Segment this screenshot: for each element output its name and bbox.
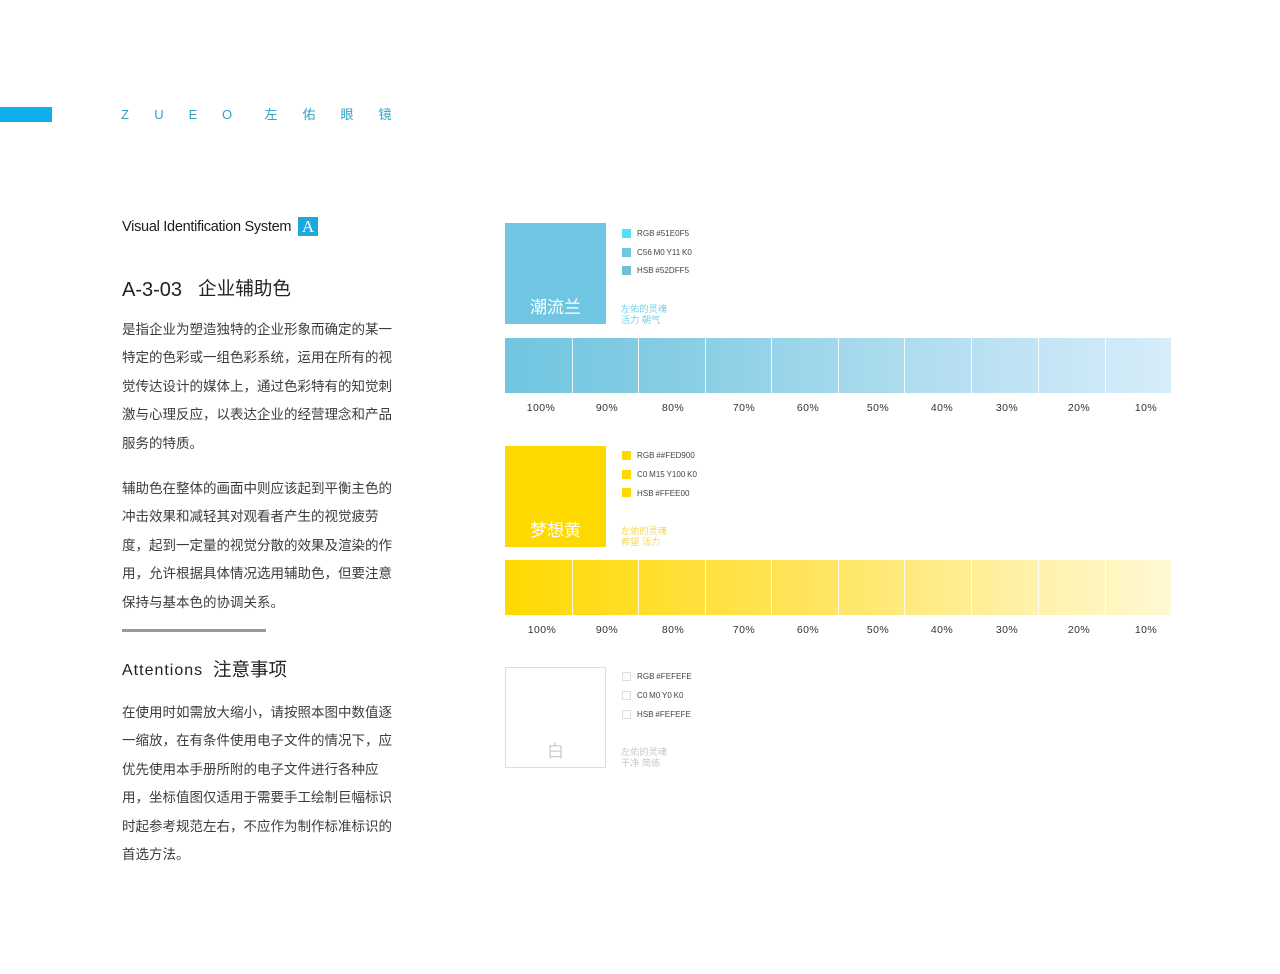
intro paragraph: 激与心理反应，以表达企业的经营理念和产品 xyxy=(122,407,392,422)
brand header xyxy=(121,107,392,122)
brand header: U xyxy=(154,107,164,122)
second paragraph: 保持与基本色的协调关系。 xyxy=(122,594,284,610)
yellow colour name: 梦想黄 xyxy=(530,520,581,540)
blue tint labels: 80% xyxy=(662,402,684,414)
icon: A badge xyxy=(298,217,318,236)
panel: yellow swatch xyxy=(505,446,606,547)
blue tint labels: 90% xyxy=(596,402,618,414)
icon: blue CMYK chip xyxy=(622,248,631,257)
yellow tint labels: 10% xyxy=(1135,624,1157,636)
yellow tint labels: 70% xyxy=(733,624,755,636)
blue description: 左佑的灵魂 xyxy=(621,304,667,314)
yellow tint labels: 60% xyxy=(797,624,819,636)
attentions paragraph: 一缩放，在有条件使用电子文件的情况下，应 xyxy=(122,733,392,748)
second paragraph: 度，起到一定量的视觉分散的效果及渲染的作 xyxy=(122,538,392,552)
icon: A badge: A xyxy=(302,217,314,236)
brand header: 眼 xyxy=(340,107,354,122)
brand header: O xyxy=(222,107,232,122)
blue RGB value: RGB #51E0F5 xyxy=(637,229,689,238)
attentions paragraph: 用，坐标值图仅适用于需要手工绘制巨幅标识 xyxy=(122,790,392,805)
yellow tint labels: 100% xyxy=(528,624,556,636)
white colour name: 白 xyxy=(547,742,564,761)
brand header: 左 xyxy=(264,107,278,122)
blue tint labels: 40% xyxy=(931,402,953,414)
system heading: Visual Identification System xyxy=(122,219,291,235)
section title: 企业辅助色 xyxy=(198,278,291,299)
intro paragraph xyxy=(122,322,392,450)
yellow tint labels: 50% xyxy=(867,624,889,636)
blue colour name: 潮流兰 xyxy=(530,298,581,317)
attentions heading: Attentions xyxy=(122,662,203,679)
intro paragraph: 特定的色彩或一组色彩系统，运用在所有的视 xyxy=(122,350,392,365)
intro paragraph: 服务的特质。 xyxy=(122,436,203,450)
attentions paragraph: 优先使用本手册所附的电子文件进行各种应 xyxy=(122,762,378,776)
second paragraph: 用，允许根据具体情况选用辅助色，但要注意 xyxy=(122,566,392,581)
blue tint labels: 60% xyxy=(797,402,819,414)
yellow description xyxy=(621,526,667,547)
yellow description: 左佑的灵魂 xyxy=(621,526,667,536)
attentions paragraph: 首选方法。 xyxy=(122,847,190,862)
blue tint labels xyxy=(527,402,1157,414)
white description xyxy=(621,747,667,768)
brand header: Z xyxy=(121,107,129,122)
yellow tint labels: 90% xyxy=(596,624,618,636)
intro paragraph: 觉传达设计的媒体上，通过色彩特有的知觉刺 xyxy=(122,378,392,394)
section title xyxy=(122,278,291,301)
attentions paragraph: 时起参考规范左右，不应作为制作标准标识的 xyxy=(122,818,392,834)
attentions heading: 注意事项 xyxy=(213,659,287,680)
yellow HSB value: HSB #FFEE00 xyxy=(637,488,690,498)
blue tint labels: 50% xyxy=(867,402,889,414)
second paragraph: 冲击效果和减轻其对观看者产生的视觉疲劳 xyxy=(122,509,378,524)
yellow tint labels: 80% xyxy=(662,624,684,636)
yellow RGB value: RGB ##FED900 xyxy=(637,451,695,460)
yellow tint labels: 30% xyxy=(996,624,1018,636)
accent bar xyxy=(0,107,52,122)
white RGB value: RGB #FEFEFE xyxy=(637,672,692,681)
brand header: 佑 xyxy=(302,107,316,122)
blue tint labels: 100% xyxy=(527,402,555,414)
intro paragraph: 是指企业为塑造独特的企业形象而确定的某一 xyxy=(122,322,392,336)
yellow CMYK value: C0 M15 Y100 K0 xyxy=(637,470,697,479)
attentions heading xyxy=(122,659,287,680)
icon: white HSB chip xyxy=(622,710,631,719)
yellow tint labels xyxy=(528,624,1157,636)
white CMYK value: C0 M0 Y0 K0 xyxy=(637,691,683,700)
white description: 左佑的灵魂 xyxy=(621,747,667,757)
white HSB value: HSB #FEFEFE xyxy=(637,710,691,719)
blue tint labels: 30% xyxy=(996,402,1018,414)
second paragraph xyxy=(122,480,392,610)
panel: blue swatch xyxy=(505,223,606,324)
icon: yellow HSB chip xyxy=(622,488,631,497)
yellow description: 希望 活力 xyxy=(621,537,660,547)
second paragraph: 辅助色在整体的画面中则应该起到平衡主色的 xyxy=(122,480,392,496)
yellow tint labels: 20% xyxy=(1068,624,1090,636)
icon: yellow RGB chip xyxy=(622,451,631,460)
attentions paragraph xyxy=(122,704,392,862)
brand header: E xyxy=(189,107,197,122)
icon: white CMYK chip xyxy=(622,691,631,700)
white description: 干净 简练 xyxy=(621,758,660,768)
attentions paragraph: 在使用时如需放大缩小，请按照本图中数值逐 xyxy=(122,704,392,720)
blue HSB value: HSB #52DFF5 xyxy=(637,266,689,275)
blue description xyxy=(621,304,667,325)
yellow tint labels: 40% xyxy=(931,624,953,636)
panel: white swatch xyxy=(505,667,606,768)
yellow tint scale xyxy=(505,560,1171,615)
blue tint labels: 70% xyxy=(733,402,755,414)
blue description: 活力 朝气 xyxy=(621,315,660,325)
icon: white RGB chip xyxy=(622,672,631,681)
icon: blue HSB chip xyxy=(622,266,631,275)
icon: blue RGB chip xyxy=(622,229,631,238)
blue CMYK value: C56 M0 Y11 K0 xyxy=(637,248,692,256)
section title: A-3-03 xyxy=(122,279,182,301)
icon: yellow CMYK chip xyxy=(622,470,631,479)
blue tint scale xyxy=(505,338,1171,393)
blue tint labels: 10% xyxy=(1135,402,1157,414)
blue tint labels: 20% xyxy=(1068,402,1090,414)
brand header: 镜 xyxy=(378,107,392,122)
